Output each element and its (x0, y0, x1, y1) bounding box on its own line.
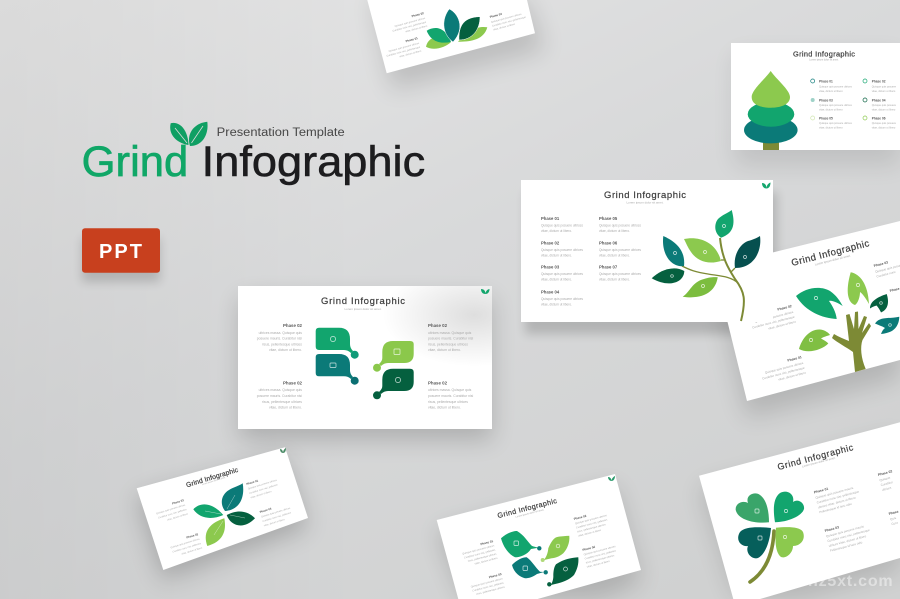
phase list columns: Quisque quis posuere ultrices (541, 297, 583, 301)
text block: Phase 01: Curabitur nunc nisi, pellentesque (386, 46, 421, 58)
text block: Phase 02: vitae, dictum ut libero (405, 24, 428, 33)
text block: Phase 01: Quisque quis posuere mauris (815, 486, 854, 500)
text block: Phase 01: Curabitur nunc nisi, pellentesque (762, 366, 805, 381)
slide title: Grind Infographic (790, 238, 871, 269)
text block: Phase 02: Phase 02 (878, 469, 893, 477)
phase list: Phase 06 (872, 116, 886, 120)
text block: Phase 04 (888, 509, 900, 526)
text block: Phase 02: Quisque quis posuere ultrices (394, 17, 426, 28)
text block: Phase 02 (168, 532, 203, 558)
text block: Phase 02 (573, 509, 611, 538)
text block: upper right phase: ultrices massa. Quisque quis (428, 331, 472, 335)
slide subtitle: Lorem ipsum dolor sit amet. (809, 58, 839, 62)
phase list columns: vitae, dictum ut libero. (541, 278, 572, 282)
phase list: Phase 05 (819, 116, 833, 120)
leaf bubble: teal (512, 557, 548, 578)
text block: Phase 03: vitae, dictum ut libero (167, 512, 189, 522)
text block: Phase 04: vitae, dictum ut libero (587, 560, 611, 569)
phase list: vitae, dictum ut libero (819, 126, 843, 130)
phase list: vitae, dictum ut libero (872, 126, 896, 130)
text block: Phase 01: Phase 01 (246, 478, 259, 486)
slide: speech bubbles (centre) (238, 286, 492, 429)
text block: Phase 03: Curabitur nunc nisi, pellentesque (827, 528, 871, 543)
text block: Phase 01: Quisque quis posuere ultrices (388, 42, 420, 53)
text block: Phase 01: Phase 01 (814, 487, 829, 494)
text block: Phase 02: Curabitur nunc nisi, pellentesque (752, 315, 795, 330)
text block: upper left phase: posuere mauris. Curabitur nisi (257, 336, 302, 340)
text block: Phase 02 (749, 304, 797, 334)
text block: Phase 03: Quisque quis posuere ultrices (156, 503, 186, 515)
phase list: vitae, dictum ut libero (872, 90, 896, 93)
text block: Phase 04: Curabitur nunc nisi, pellentes (584, 549, 617, 560)
text block: Phase 03: Quisque quis posuere mauris (826, 524, 865, 538)
text block: Phase 01: Curabitur nunc nisi, pellentes (249, 483, 279, 495)
phase list columns: Quisque quis posuere ultrices (541, 248, 583, 252)
text block: Phase 04: vitae, dictum ut libero (264, 518, 286, 527)
text block: Phase 02: risus, pellentesque ultrices (577, 523, 607, 534)
text block: Phase 02: Curabitur nunc nisi, pellentes (172, 542, 202, 554)
text block: Phase 02: Quisque (879, 475, 891, 482)
text block: Phase 04: Phase 04 (582, 545, 596, 552)
phase list columns: vitae, dictum ut libero. (599, 229, 630, 233)
text block: lower right phase: Phase 02 (428, 380, 448, 386)
text block: Phase 04: Cura (891, 520, 899, 526)
slide subtitle: Lorem ipsum dolor sit amet. (344, 307, 382, 311)
bubble: teal (316, 354, 359, 385)
text block: Phase 01: vitae, dictum ut libero (399, 49, 422, 58)
text block: Phase 01: vitae, dictum ut libero (778, 371, 807, 382)
text block: Phase 01: ultrices vitae, dictum ut libero (818, 495, 856, 509)
text block: Phase 01: Quisque quis posuere ultrices (462, 544, 495, 556)
phase list: Phase 03 (819, 98, 833, 102)
phase list: Quisque quis posuere (872, 122, 897, 125)
text block: Phase 03: Quisque quis posuere ultrices (491, 13, 523, 24)
slide title: Grind Infographic (793, 50, 855, 58)
four petal chart (193, 483, 255, 546)
text block: Phase 01 (814, 479, 862, 514)
phase list columns: Phase 01 (541, 216, 560, 221)
text block: Phase 03: Quisque quis posuere ultrices (470, 577, 504, 589)
leaf bubble: dark green (547, 557, 578, 586)
branch and leaves graphic (652, 210, 760, 321)
text block: Phase 04: Curabitur nunc nisi, pellentes (262, 511, 292, 523)
text block: Phase 02: Phase 02 (573, 514, 587, 521)
text block: lower right phase: vitae, dictum ut libero. (428, 406, 461, 410)
text block: lower right phase: risus, pellentesque ultrices (428, 400, 468, 404)
watermark: nz5xt.com (808, 573, 893, 590)
text block: upper left phase: vitae, dictum ut libero. (269, 348, 302, 352)
leaf bubble: lime (541, 536, 569, 562)
phase list columns: Phase 02 (541, 240, 560, 245)
phase list columns: vitae, dictum ut libero. (541, 254, 572, 258)
main title: Grind Infographic (82, 138, 425, 186)
text block: Phase 01: Quisque quis posuere ultrices (247, 478, 278, 490)
slide title: Grind Infographic (185, 467, 240, 489)
logo mark (762, 182, 770, 188)
phase list: vitae, dictum ut libero (819, 108, 843, 112)
phase list columns: Phase 05 (599, 216, 618, 221)
slide title: Grind Infographic (604, 190, 686, 201)
text block: upper right phase: vitae, dictum ut libero. (428, 348, 461, 352)
bubble: green (316, 328, 359, 359)
text block: Phase 02: vitae, dictum ut libero (768, 320, 797, 331)
slide: branch with seven leaves (521, 180, 773, 322)
slide: four petals (bottom left) (137, 447, 308, 570)
text block: Phase 02: vitae, dictum ut libero (578, 529, 602, 538)
text block: upper right phase: Phase 02 (428, 323, 448, 328)
phase list: Quisque quis posuere (872, 86, 897, 88)
text block: lower left phase: ultrices massa. Quisque quis (259, 388, 302, 392)
slide subtitle: Lorem ipsum dolor sit amet. (814, 253, 851, 267)
slide: hand (right) (714, 221, 900, 401)
text block: Phase 03: Curabitur nunc nisi, pellentes (472, 581, 505, 593)
slide: leaf bubbles (bottom centre) (437, 474, 641, 599)
text block: Phase 03: Phase 03 (489, 12, 503, 19)
logo: green leaf sprout (170, 122, 208, 146)
text block: lower left phase: posuere mauris. Curabitur nisi (257, 394, 302, 398)
slide: lotus (top centre) (367, 0, 535, 73)
text block: upper left phase: risus, pellentesque ultrices (262, 342, 302, 346)
text block: Phase 04 (582, 540, 620, 569)
text block: Phase 03 (873, 257, 900, 279)
text block: Phase 01: Curabitur nunc nisi, pellentesque (816, 489, 860, 505)
text block: Phase 03: Pellentesque id lacu odio (830, 540, 863, 553)
main title: Grind Infographic: Infographic (202, 138, 425, 186)
main title: Grind Infographic: Grind (82, 138, 188, 186)
phase list columns: Quisque quis posuere ultrices (599, 272, 641, 276)
slide subtitle: Lorem ipsum dolor sit amet. (802, 456, 836, 468)
text block: Phase 02 (878, 469, 897, 492)
slide title: Grind Infographic (776, 442, 855, 472)
logo mark (280, 448, 286, 453)
phase list: Phase 01 (819, 80, 833, 84)
logo mark (608, 476, 615, 481)
text block: Phase 01: risus, pellentesque ultrices (468, 552, 498, 563)
text block: Phase 04: Quisque quis posuere ultrices (261, 506, 291, 518)
leaf bubble: green (501, 531, 542, 557)
text block: Phase 02: Phase 02 (186, 532, 199, 540)
badge: PPT: PPT (99, 241, 142, 263)
phase list columns: Phase 04 (541, 289, 560, 294)
text block: lower left phase: vitae, dictum ut libero. (269, 406, 302, 410)
text block: Phase 01: Curabitur nunc nisi, pellentes (464, 548, 496, 560)
phase list: Phase 02 (872, 80, 886, 84)
slide title: Grind Infographic (321, 296, 405, 307)
text block: Phase 03: Curabitur nunc nisi, pellentesque (492, 16, 527, 28)
slide subtitle: Lorem ipsum dolor sit amet. (202, 476, 227, 486)
text block: Phase 04: risus, pellentesque ultrices (585, 554, 615, 565)
text block: Phase 03 (469, 572, 506, 597)
text block: Phase 01 (461, 539, 499, 568)
text block: Phase 04: Phase (888, 509, 899, 516)
phase list columns: Phase 06 (599, 240, 618, 245)
text block: Phase 02: Quisque quis posuere ultrices (170, 537, 201, 549)
text block: Phase 03: Phase 03 (824, 525, 840, 533)
phase list columns: Quisque quis posuere ultrices (599, 224, 641, 228)
text block: Phase 02: Curabitur nunc nisi, pellentes (576, 518, 608, 529)
slide title: Grind Infographic (496, 496, 558, 520)
text block: Phase 01: vitae, dictum ut libero (474, 557, 498, 566)
bubble: lime (373, 341, 414, 372)
text block: Phase 02: Phase 02 (411, 11, 425, 18)
text block: lower left phase (257, 380, 303, 410)
text block: Phase 04: Phase (889, 287, 900, 293)
text block: Phase 02: vitae, dictum ut libero (181, 546, 203, 556)
text block: Phase 02: ultrices (882, 485, 892, 492)
text block: upper right phase: risus, pellentesque ultrices (428, 342, 468, 346)
slide subtitle: Lorem ipsum dolor sit amet. (515, 508, 545, 519)
text block: lower right phase (428, 380, 473, 410)
text block: upper left phase: Phase 02 (283, 323, 303, 328)
text block: upper left phase: ultrices massa. Quisque quis (259, 331, 302, 335)
text block: Phase 03 (489, 6, 528, 32)
phase list columns: Quisque quis posuere ultrices (541, 224, 583, 228)
text block: Phase 03: Phase 03 (873, 260, 889, 268)
text block: Phase 03: vitae, dictum ut libero (493, 23, 516, 32)
text block: Phase 01 (759, 355, 807, 385)
phase list columns: Quisque quis posuere ultrices (541, 272, 583, 276)
text block: Phase 01: Phase 01 (787, 355, 802, 363)
text block: lower right phase: ultrices massa. Quisque quis (428, 388, 472, 392)
phase list columns: Phase 03 (541, 265, 560, 270)
text block: Phase 02: Quisque quis posuere ultrices (754, 310, 794, 324)
lotus chart (426, 9, 487, 49)
text block: Phase 03 (824, 518, 873, 553)
text block: Phase 02: Curabitur (880, 480, 893, 487)
text block: Phase 03: Curabitur nunc (876, 270, 897, 279)
text block: Phase 04 (259, 501, 294, 527)
text block: upper right phase: posuere mauris. Curabitur nisi (428, 336, 473, 340)
text block: Phase 04: Phase 04 (259, 506, 272, 514)
hand with leaves graphic (796, 272, 899, 372)
phase list columns: Quisque quis posuere ultrices (599, 248, 641, 252)
text block: Phase 03: ultrices vitae, dictum ut libero (828, 534, 867, 548)
phase list columns: vitae, dictum ut libero. (599, 254, 630, 258)
text block: Phase 02: Phase 02 (777, 304, 792, 312)
phase list (811, 79, 897, 130)
pine tree graphic (744, 71, 798, 150)
text block: Phase 01 (384, 36, 422, 62)
text block: Phase 03 (154, 498, 189, 524)
clover graphic (736, 492, 804, 582)
badge: PPT (82, 228, 160, 273)
text block: Phase 01: vitae, dictum ut libero (250, 490, 273, 499)
text block: Phase 03: Phase 03 (488, 572, 502, 579)
phase list: Quisque quis posuere ultrices (819, 86, 853, 88)
text block: Phase 02: Curabitur nunc nisi, pellentesque (392, 21, 427, 33)
text block: lower left phase: risus, pellentesque ultrices (262, 400, 302, 404)
slide subtitle: Lorem ipsum dolor sit amet. (626, 200, 664, 204)
phase list columns: vitae, dictum ut libero. (541, 229, 572, 233)
tagline: Presentation Template: Presentation Template (217, 127, 345, 139)
text block: Phase 04: Quisque quis posuere ultrices (583, 545, 617, 556)
text block: Phase 01: Phase 01 (405, 36, 419, 43)
text block: Phase 01: Phase 01 (480, 539, 494, 546)
text block: upper left phase (257, 323, 303, 352)
text block: upper right phase (428, 323, 473, 352)
phase list: Quisque quis posuere ultrices (819, 104, 853, 107)
phase list: Quisque quis posuere (872, 104, 897, 107)
phase list columns: Phase 07 (599, 265, 618, 270)
text block: Phase 03: risus, pellentesque ultrices (476, 585, 506, 596)
phase list: Phase 04 (872, 98, 886, 102)
bubble: dark green (373, 369, 414, 399)
text block: Phase 01 (246, 473, 281, 499)
text block: Phase 02 (390, 11, 428, 37)
slide: four leaf clover (bottom right) (699, 422, 900, 599)
text block: Phase 03: Curabitur nunc nisi, pellentes (158, 508, 188, 520)
text block: Phase 02: Quisque quis posuere ultrices (575, 514, 608, 525)
text block: Phase 01: Pellentesque id lacu odio (819, 502, 852, 514)
phase list columns (541, 216, 641, 306)
text block: Phase 03: Phase 03 (172, 498, 185, 506)
phase list: vitae, dictum ut libero (872, 108, 896, 112)
phase list columns: vitae, dictum ut libero. (599, 278, 630, 282)
text block: Phase 04: Quis (890, 516, 897, 521)
logo mark (481, 289, 490, 294)
phase list: Quisque quis posuere ultrices (819, 122, 853, 125)
phase list columns: vitae, dictum ut libero. (541, 302, 572, 306)
text block: Phase 01: Quisque quis posuere ultrices (764, 361, 804, 375)
phase list: vitae, dictum ut libero (819, 90, 843, 93)
text block: lower right phase: posuere mauris. Curabitur nisi (428, 394, 473, 398)
slide: tree (top right) (731, 43, 900, 150)
text block: lower left phase: Phase 02 (283, 380, 303, 386)
